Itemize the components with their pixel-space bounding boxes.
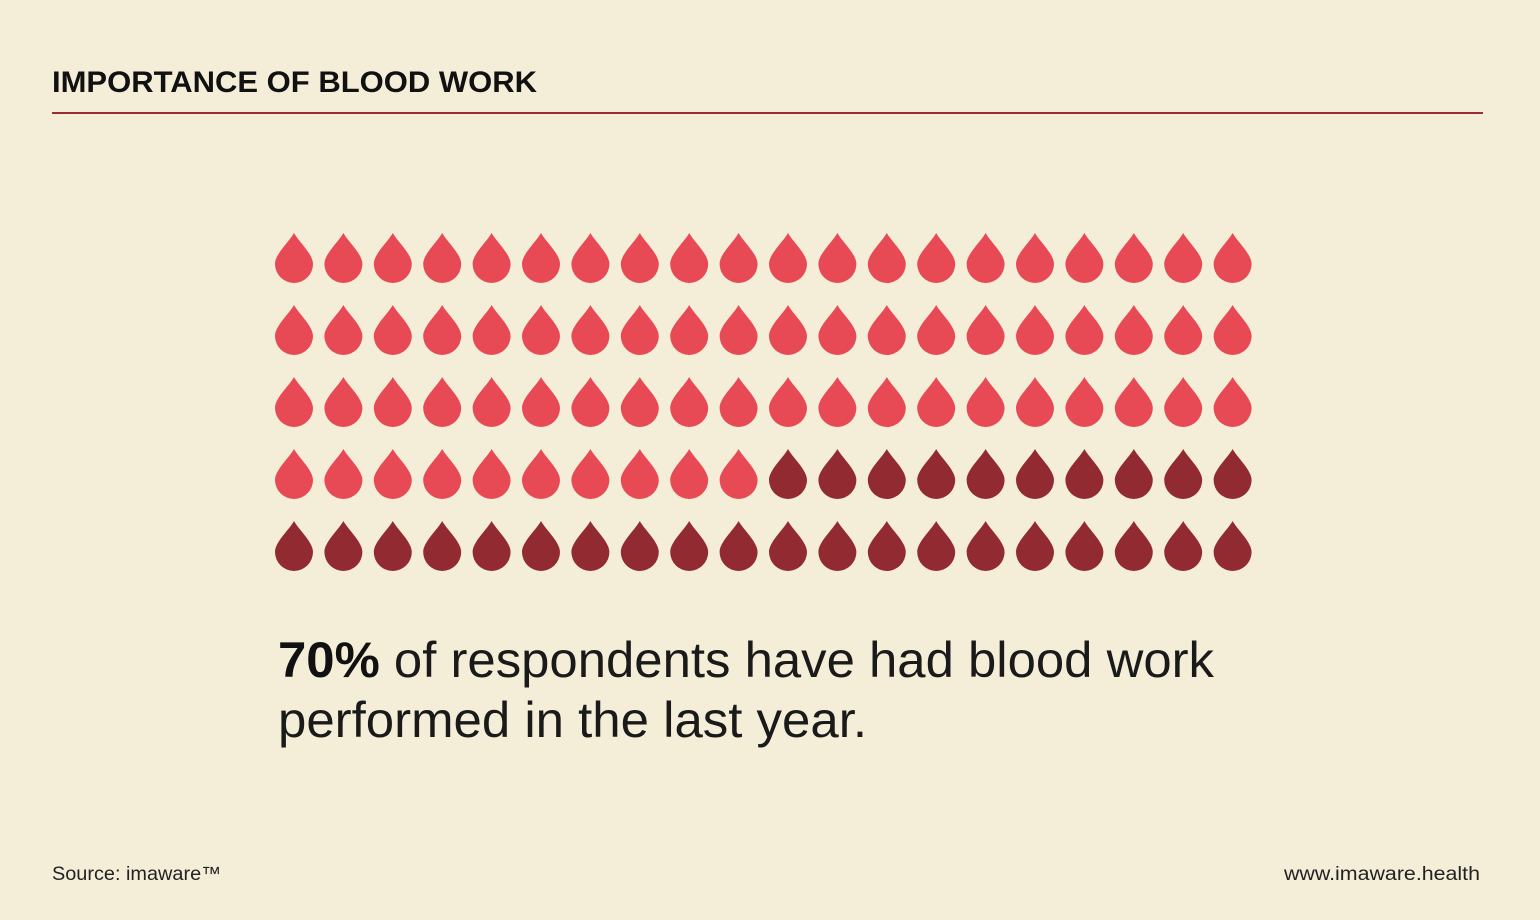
row 5 [275, 521, 1252, 571]
row 1 [275, 233, 1252, 283]
statement text [278, 632, 1215, 748]
row 2 [275, 305, 1252, 355]
statement text: performed in the last year. [278, 692, 867, 748]
title: IMPORTANCE OF BLOOD WORK [52, 66, 537, 99]
source: Source: imaware™ [52, 864, 221, 885]
row 3 [275, 377, 1252, 427]
pictogram: 100 blood drops, 70 highlighted [275, 233, 1252, 571]
row 4 [275, 449, 1252, 499]
statement text: 70% of respondents have had blood work [278, 632, 1215, 688]
website: www.imaware.health [1283, 864, 1480, 885]
